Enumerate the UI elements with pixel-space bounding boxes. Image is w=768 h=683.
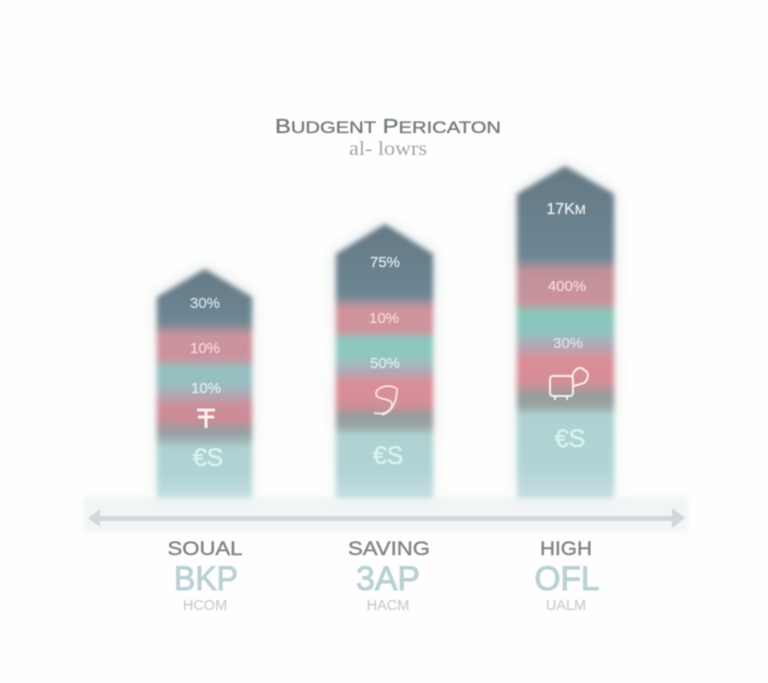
arrow: double-headed axis <box>88 508 685 528</box>
column 2: Saving <box>336 224 433 498</box>
icon: swirl <box>374 386 397 415</box>
unit: UALM: UALM <box>546 598 586 614</box>
value: 10%: 10% <box>369 310 399 327</box>
column 3: High <box>517 166 614 498</box>
value: 3AP: 3AP <box>356 560 420 598</box>
value: 75%: 75% <box>370 254 400 271</box>
axis band <box>84 497 688 532</box>
icon: currency symbol <box>197 410 215 428</box>
subtitle: al- lowrs <box>349 138 427 160</box>
value: 30%: 30% <box>553 335 583 352</box>
value: OFL: OFL <box>534 560 600 598</box>
value: €S: €S <box>193 444 223 472</box>
label group: Saving: SAVING <box>348 539 430 560</box>
icon: device with cloud <box>550 368 588 400</box>
value: 400%: 400% <box>548 278 586 295</box>
value: 17KM: 17KM <box>546 201 586 218</box>
title: BUDGENT PERICATON <box>275 116 501 138</box>
value: 10% teal: 10% <box>191 380 221 397</box>
label group: Soual <box>168 539 242 614</box>
value: 30%: 30% <box>190 295 220 312</box>
value: €S: €S <box>373 442 403 470</box>
unit: HCOM: HCOM <box>183 598 227 614</box>
unit: HACM: HACM <box>367 598 409 614</box>
value: BKP: BKP <box>174 560 238 598</box>
column 1: Soual <box>157 269 252 498</box>
label group: Saving <box>348 539 430 614</box>
label group: High: HIGH <box>540 539 592 560</box>
label group: High <box>534 539 600 614</box>
value: €S: €S <box>555 425 585 453</box>
value: 10% rose: 10% <box>190 340 220 357</box>
value: 50%: 50% <box>370 355 400 372</box>
label group: Soual: SOUAL <box>168 539 242 560</box>
